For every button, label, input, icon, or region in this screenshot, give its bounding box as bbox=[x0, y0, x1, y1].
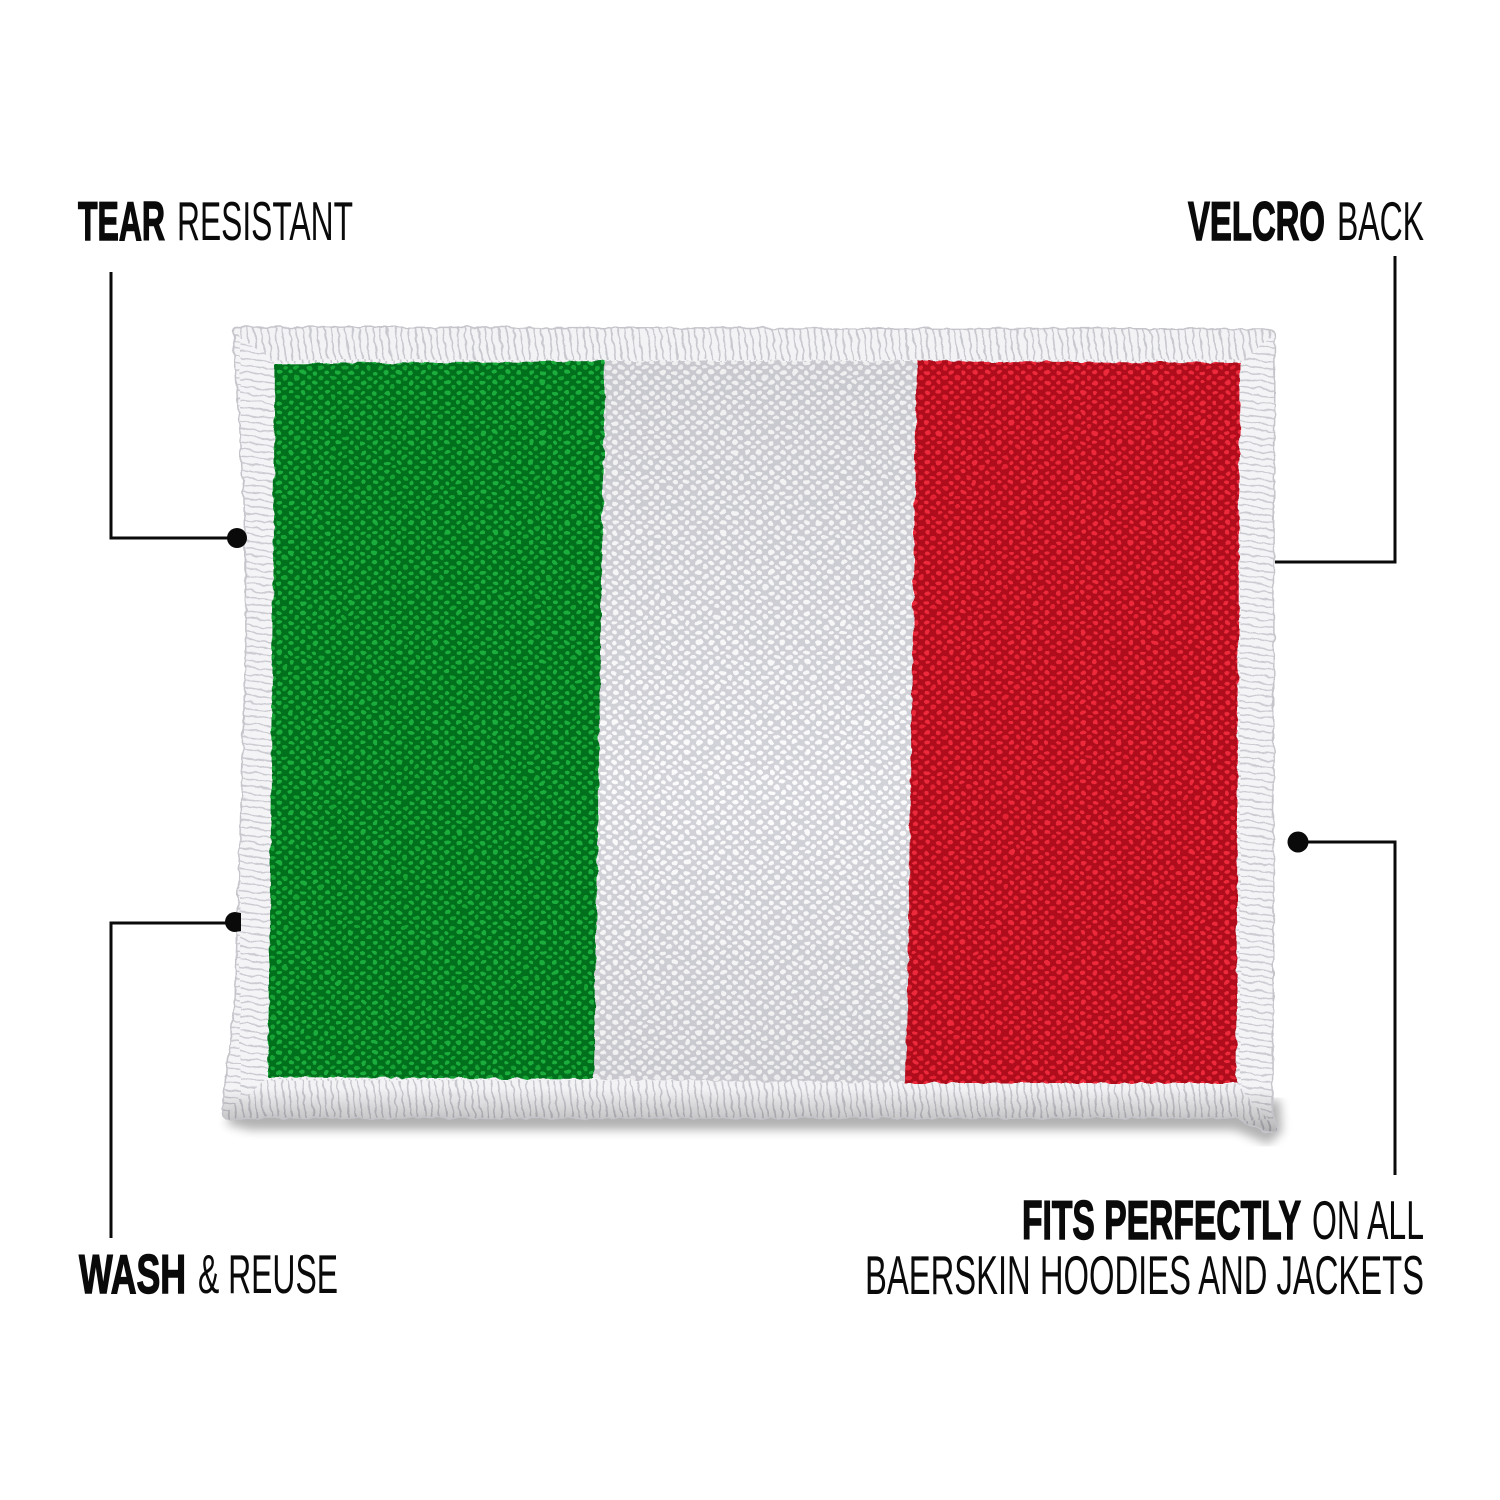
callout line: fits perfectly bbox=[1288, 832, 1395, 1175]
label: wash and reuse: WASH bbox=[79, 1243, 186, 1305]
red stripe bbox=[906, 361, 1240, 1083]
label: wash and reuse bbox=[79, 1243, 338, 1305]
label: tear resistant bbox=[78, 190, 353, 252]
label: fits perfectly: ON ALL bbox=[1312, 1189, 1424, 1251]
label: wash and reuse: & REUSE bbox=[198, 1243, 338, 1305]
callout line: velcro back bbox=[1275, 256, 1395, 562]
label: velcro back: BACK bbox=[1337, 190, 1424, 252]
label: fits perfectly: FITS PERFECTLY bbox=[1022, 1189, 1301, 1251]
white stripe bbox=[594, 361, 917, 1083]
label: velcro back: VELCRO bbox=[1188, 190, 1325, 252]
label: tear resistant: RESISTANT bbox=[177, 190, 353, 252]
patch drop shadow bbox=[226, 1100, 1282, 1144]
label: tear resistant: TEAR bbox=[78, 190, 165, 252]
callout line: tear resistant bbox=[111, 272, 247, 548]
patch border bbox=[215, 320, 1285, 1140]
patch: Italian flag embroidered patch bbox=[215, 320, 1285, 1144]
label: fits perfectly bbox=[865, 1189, 1424, 1306]
callout line: wash and reuse bbox=[111, 912, 241, 1238]
green stripe bbox=[268, 361, 605, 1079]
flag stripes bbox=[268, 361, 1240, 1083]
